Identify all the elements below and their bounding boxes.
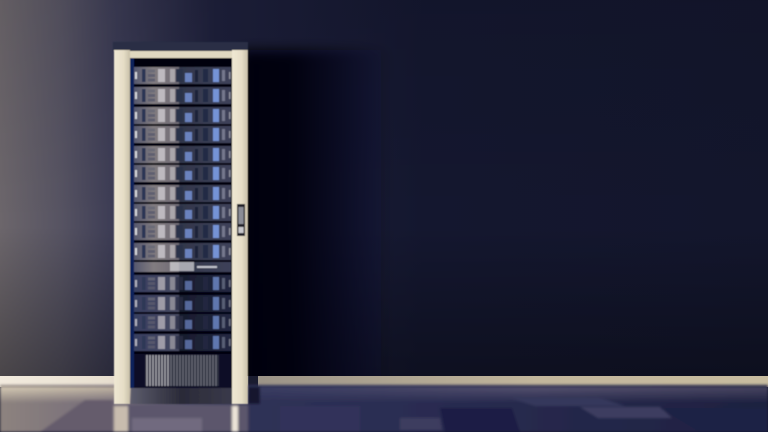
skirting board [0, 376, 768, 387]
door top rail [130, 51, 232, 58]
network switch [134, 262, 231, 272]
rack base [131, 388, 232, 404]
rack top cap [113, 42, 248, 51]
door post left [114, 50, 130, 404]
ventilation grille [134, 354, 231, 388]
door post right [232, 50, 248, 404]
door handle [237, 204, 245, 236]
server units [134, 67, 231, 351]
floor [0, 385, 768, 432]
rack interior [130, 58, 232, 388]
server rack [113, 42, 248, 404]
rack shadow on wall [240, 50, 390, 390]
